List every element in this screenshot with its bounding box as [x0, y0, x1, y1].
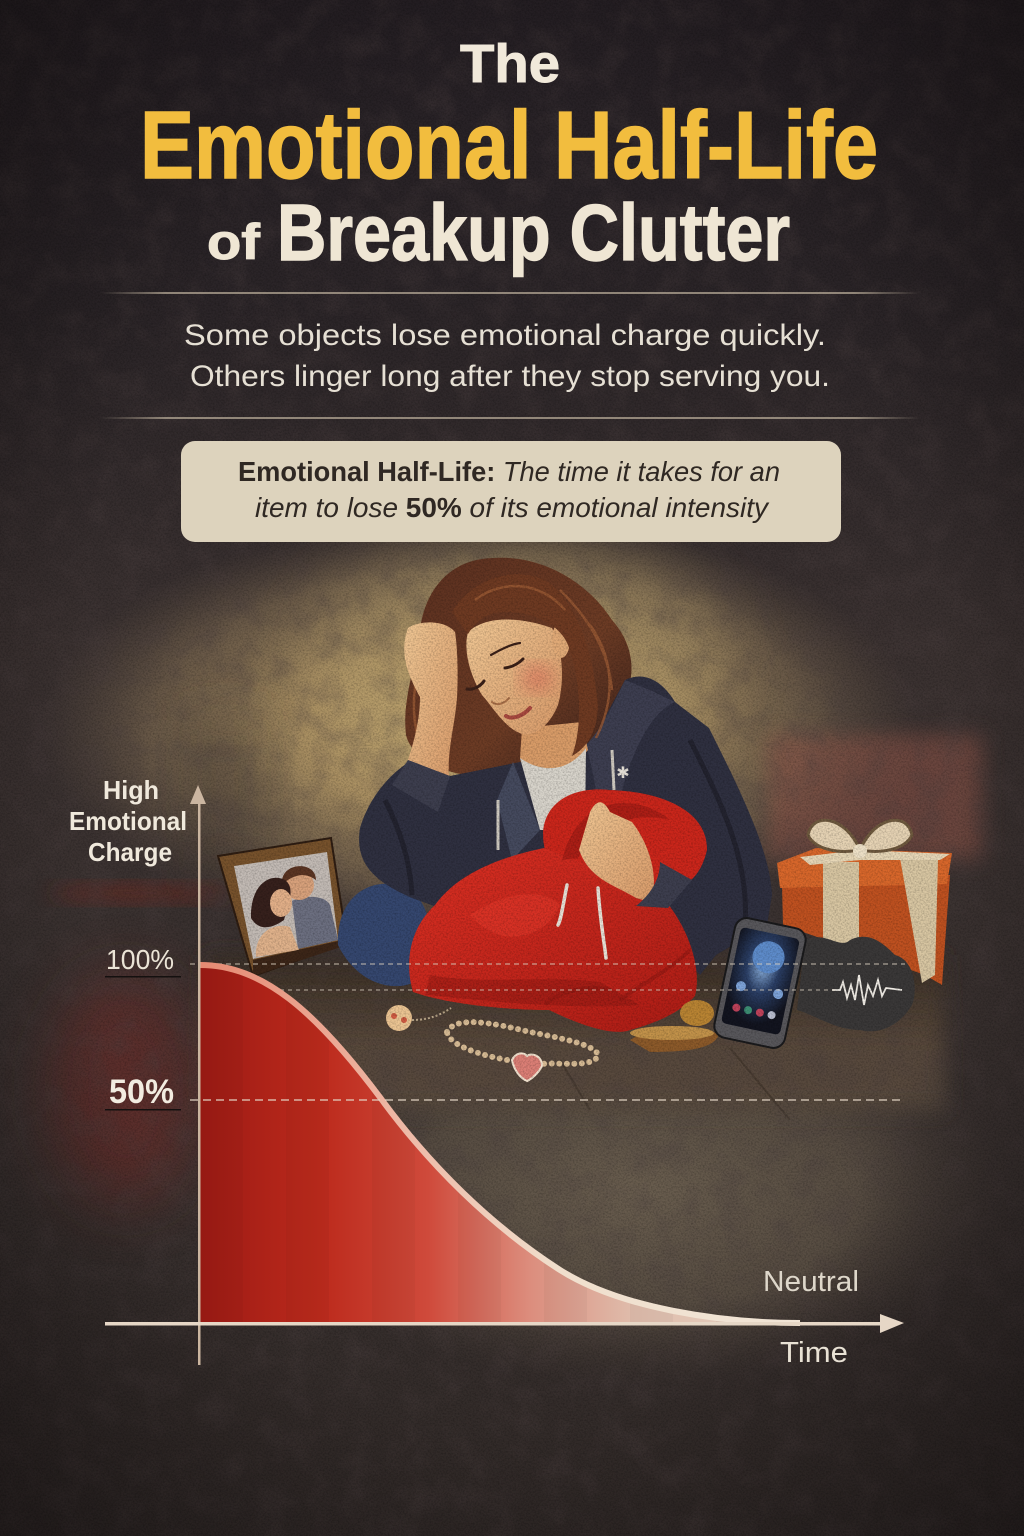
hoodie collar — [497, 762, 540, 860]
label: Neutral: Neutral — [763, 1266, 859, 1298]
left collar string — [496, 800, 500, 850]
raised hand and forearm — [404, 622, 458, 776]
chart: emotional charge decay — [69, 775, 905, 1369]
hair front — [414, 574, 612, 756]
sleeve cuff — [392, 760, 450, 812]
y axis label — [69, 775, 187, 867]
hand holding hoodie — [579, 802, 654, 902]
right collar string — [612, 750, 614, 790]
gift box — [777, 820, 952, 985]
ear — [552, 622, 570, 658]
flower charm — [386, 1005, 451, 1031]
reference line: 50% — [190, 1099, 905, 1101]
title line: Emotional Half-Life: Emotional Half-Life — [140, 92, 878, 199]
cheek blush — [522, 666, 552, 690]
decay curve area — [200, 960, 800, 1325]
hood folds — [586, 680, 675, 830]
right cuff — [636, 862, 692, 908]
label: Charge: Charge — [88, 837, 172, 867]
drawstrings — [558, 885, 606, 958]
reference line: secondary — [280, 989, 835, 991]
callout: definition — [181, 441, 841, 542]
neck — [520, 722, 588, 769]
star emblem: ✱ — [616, 765, 630, 782]
wooden discs — [630, 1000, 719, 1052]
label: High: High — [103, 775, 159, 805]
picture frame with couple photo — [218, 838, 347, 976]
title line: of: of — [207, 214, 260, 270]
definition line 1: Emotional Half-Life: The time it takes for an — [238, 456, 780, 487]
dark hoodie body — [359, 677, 772, 975]
torn dark cloud with waveform — [797, 937, 915, 1031]
subtitle — [184, 319, 830, 393]
label: Emotional: Emotional — [69, 806, 187, 836]
title line: Breakup Clutter: Breakup Clutter — [277, 188, 790, 277]
reference line: 100% — [190, 963, 905, 965]
closed eyes, brow, nose and mouth — [467, 643, 530, 718]
tick label: 50%: 50% — [109, 1073, 174, 1111]
label: Time: Time — [780, 1337, 848, 1369]
smartphone — [712, 916, 808, 1050]
subtitle line 2: Others linger long after they stop serving you. — [190, 360, 830, 393]
definition line 2: item to lose 50% of its emotional intensity — [255, 492, 770, 523]
illustration: woman with breakup items — [218, 558, 952, 1081]
hair back — [405, 558, 631, 777]
subtitle line 1: Some objects lose emotional charge quickly. — [184, 319, 826, 352]
title — [140, 34, 878, 277]
jeans leg — [338, 884, 430, 986]
face — [466, 619, 562, 734]
y axis with arrow — [190, 785, 206, 1365]
sleeve shading — [385, 740, 746, 925]
red hoodie bundle — [409, 789, 707, 1032]
x axis with arrow — [105, 1314, 904, 1333]
tick label: 100%: 100% — [106, 944, 174, 975]
white t-shirt — [520, 748, 586, 830]
title line: The: The — [460, 34, 560, 94]
pearl necklace with heart pendant — [447, 1022, 598, 1081]
